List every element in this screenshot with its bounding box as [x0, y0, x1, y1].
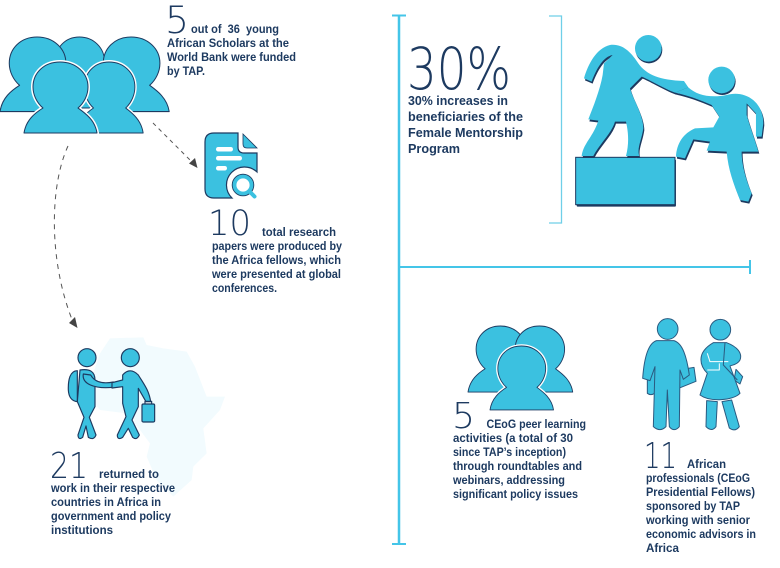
- text: 5 out of 36 scholars: by TAP.: [167, 66, 205, 78]
- text: 5 CEoG peer learning activities: through roundtables and: [453, 461, 582, 473]
- text: 21 returned to Africa: government and policy: [51, 511, 172, 523]
- text: 10 research papers: total research: [262, 227, 336, 239]
- text: 5 CEoG peer learning activities: [452, 396, 586, 501]
- text: 11 African professionals: African: [687, 459, 726, 471]
- arrow: scholars to research papers: [153, 123, 198, 168]
- map: Africa silhouette: [90, 337, 225, 497]
- text: 5 out of 36 scholars: African Scholars at the: [167, 38, 289, 50]
- text: 5 CEoG peer learning activities: activities (a total of 30: [453, 433, 573, 445]
- text: 10 research papers: [208, 204, 343, 295]
- text: 11 African professionals: Presidential Fellows): [646, 487, 755, 499]
- text: 10 research papers: were presented at global: [211, 269, 341, 281]
- text: 11 African professionals: Africa: [646, 543, 680, 555]
- text: 21 returned to Africa: [50, 446, 175, 537]
- text: 11 African professionals: working with senior: [645, 515, 751, 527]
- text: 21 returned to Africa: countries in Africa in: [51, 497, 161, 509]
- text: 11 African professionals: professionals (CEoG: [646, 473, 750, 485]
- text: 30% female mentorship: 30%: [407, 35, 511, 103]
- icon: five scholars group: [0, 37, 169, 133]
- text: 30% female mentorship: [407, 35, 523, 156]
- text: 11 African professionals: economic advisors in: [646, 529, 756, 541]
- text: 30% female mentorship: 30% increases in: [408, 94, 508, 108]
- text: 5 out of 36 scholars: 5: [165, 0, 189, 42]
- text: 10 research papers: papers were produced by: [212, 241, 343, 253]
- icon: three people peer group: [468, 326, 573, 410]
- arrow: scholars to returned fellows: [54, 146, 78, 328]
- text: 30% female mentorship: Female Mentorship: [408, 126, 523, 140]
- text: 10 research papers: 10: [208, 204, 251, 244]
- text: 5 out of 36 scholars: [165, 0, 296, 78]
- text: 11 African professionals: sponsored by TAP: [646, 501, 740, 513]
- text: 21 returned to Africa: work in their respective: [50, 483, 175, 495]
- text: 30% female mentorship: beneficiaries of the: [408, 110, 523, 124]
- text: 5 CEoG peer learning activities: webinars, addressing: [452, 475, 565, 487]
- icon: two presidential fellows with books: [643, 319, 743, 430]
- text: 5 CEoG peer learning activities: CEoG peer learning: [486, 419, 586, 431]
- text: 5 CEoG peer learning activities: significant policy issues: [453, 489, 578, 501]
- text: 5 out of 36 scholars: World Bank were funded: [167, 52, 296, 64]
- text: 11 African professionals: 11: [644, 436, 677, 477]
- icon: research document with magnifier: [205, 133, 257, 198]
- text: 5 CEoG peer learning activities: 5: [452, 396, 475, 437]
- text: 21 returned to Africa: 21: [50, 446, 88, 487]
- text: 5 CEoG peer learning activities: since TAP’s inception): [453, 447, 566, 459]
- icon: two people shaking hands: [68, 349, 155, 439]
- icon: woman helping another climb a step: [576, 35, 764, 207]
- text: 10 research papers: the Africa fellows, which: [212, 255, 341, 267]
- frame: main vertical and horizontal rules: [392, 15, 750, 544]
- text: 10 research papers: conferences.: [212, 283, 277, 295]
- bracket: mentorship section: [549, 16, 562, 223]
- text: 30% female mentorship: Program: [408, 142, 460, 156]
- text: 21 returned to Africa: returned to: [99, 469, 159, 481]
- text: 5 out of 36 scholars: out of 36 young: [191, 24, 279, 36]
- text: 21 returned to Africa: institutions: [51, 525, 113, 537]
- text: 11 African professionals: [644, 436, 756, 555]
